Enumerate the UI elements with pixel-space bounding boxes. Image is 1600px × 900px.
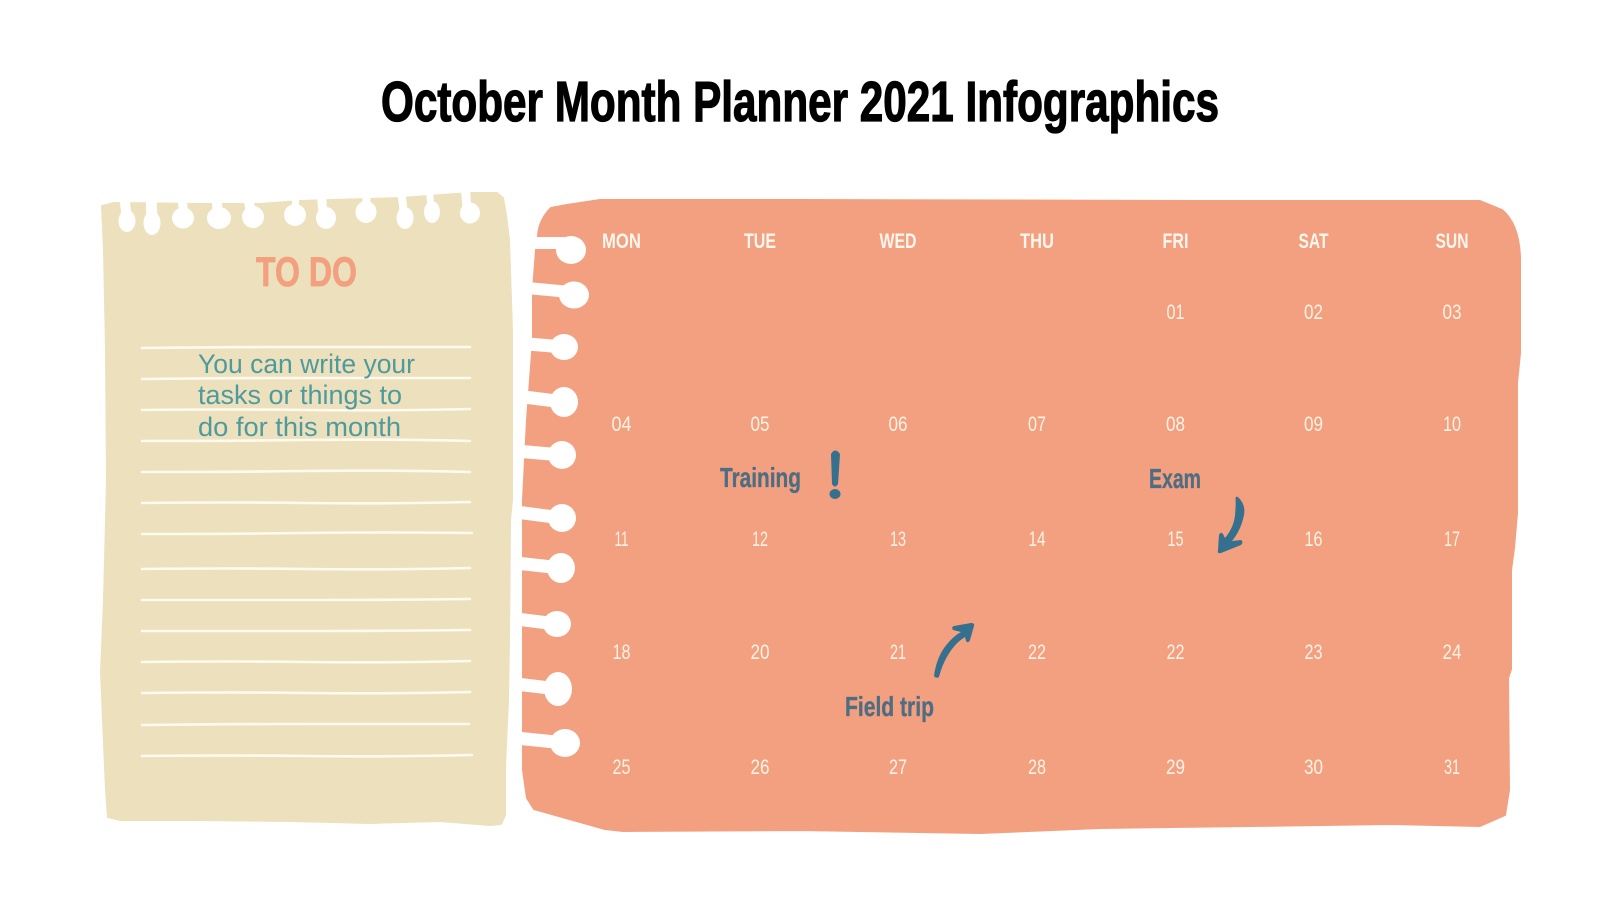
event label: field trip: Field trip [845, 691, 934, 722]
weekday headers: TUE [744, 230, 776, 253]
heading: to do: TO DO [256, 248, 357, 295]
week 2 dates: 06 [888, 413, 908, 436]
panel: calendar [516, 200, 1520, 833]
week 2 dates [612, 413, 1461, 436]
paper sheet [101, 193, 512, 825]
panel: to do notepad [101, 184, 512, 825]
week 4 dates: 20 [750, 641, 770, 664]
icon: exclamation mark [830, 450, 840, 499]
weekday headers: MON [602, 230, 641, 253]
week 1 dates [1166, 301, 1462, 324]
week 5 dates: 29 [1166, 756, 1185, 779]
week 2 dates: 05 [750, 413, 770, 436]
week 5 dates: 31 [1444, 756, 1460, 779]
title: October Month Planner 2021 Infographics [381, 70, 1219, 134]
weekday headers: THU [1020, 230, 1054, 253]
weekday headers [602, 230, 1468, 253]
week 3 dates: 14 [1028, 528, 1046, 551]
weekday headers: FRI [1162, 230, 1188, 253]
week 2 dates: 08 [1166, 413, 1185, 436]
weekday headers: WED [880, 230, 916, 253]
week 5 dates [612, 756, 1460, 779]
week 3 dates: 12 [752, 528, 768, 551]
week 4 dates: 23 [1304, 641, 1322, 664]
week 5 dates: 28 [1028, 756, 1046, 779]
week 5 dates: 25 [612, 756, 630, 779]
week 4 dates: 18 [612, 641, 630, 664]
weekday headers: SAT [1298, 230, 1329, 253]
week 3 dates: 13 [890, 528, 906, 551]
body text: You can write your [198, 349, 415, 379]
week 2 dates: 09 [1304, 413, 1323, 436]
event label: exam: Exam [1149, 463, 1201, 494]
week 4 dates: 24 [1442, 641, 1462, 664]
calendar sheet [523, 200, 1520, 833]
week 2 dates: 10 [1443, 413, 1461, 436]
week 2 dates: 04 [612, 413, 632, 436]
arrow: exam to day 15 [1218, 497, 1244, 553]
week 5 dates: 27 [889, 756, 907, 779]
week 4 dates [612, 641, 1462, 664]
week 5 dates: 30 [1304, 756, 1323, 779]
torn binding holes [118, 184, 480, 235]
body text: tasks or things to [198, 380, 402, 410]
week 3 dates: 11 [614, 528, 628, 551]
week 3 dates: 16 [1304, 528, 1322, 551]
week 1 dates: 02 [1304, 301, 1323, 324]
spiral rings [516, 236, 589, 757]
week 1 dates: 01 [1166, 301, 1184, 324]
week 2 dates: 07 [1028, 413, 1046, 436]
week 3 dates: 17 [1444, 528, 1460, 551]
ruled lines [142, 347, 472, 756]
week 5 dates: 26 [750, 756, 770, 779]
week 4 dates: 22 [1166, 641, 1184, 664]
arrow: field trip to day 21 [934, 623, 974, 678]
week 3 dates: 15 [1168, 528, 1184, 551]
week 4 dates: 21 [890, 641, 906, 664]
body text: do for this month [198, 412, 401, 442]
week 3 dates [614, 528, 1460, 551]
event label: training: Training [720, 462, 801, 493]
week 1 dates: 03 [1442, 301, 1462, 324]
weekday headers: SUN [1436, 230, 1468, 253]
body text [198, 349, 415, 442]
week 4 dates: 22 [1028, 641, 1046, 664]
